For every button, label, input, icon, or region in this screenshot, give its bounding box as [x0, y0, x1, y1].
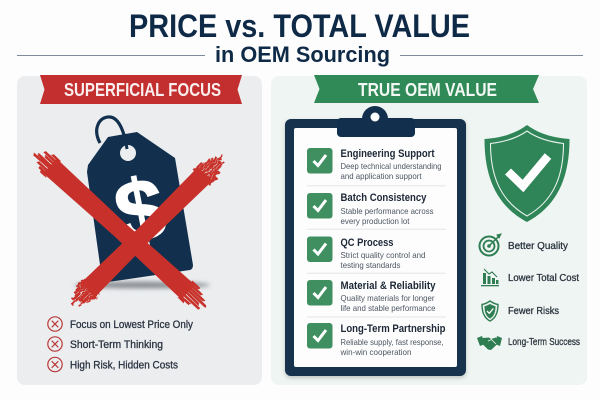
item: short-term thinking: Short-Term Thinking — [70, 339, 163, 351]
icon: target — [480, 234, 501, 256]
item: long-term partnership: Long-Term Partnership — [340, 323, 446, 335]
item: short-term thinking — [48, 337, 163, 351]
item: batch consistency: every production lot — [340, 216, 410, 226]
panel: true OEM value — [271, 75, 587, 385]
item: material and reliability — [307, 280, 436, 313]
title: PRICE vs. TOTAL VALUE — [129, 8, 470, 44]
item: engineering support: and application support — [340, 171, 422, 181]
item: hidden costs — [48, 357, 178, 372]
item: long-term partnership: win-win cooperation — [340, 347, 412, 357]
item: engineering support: Deep technical understanding — [340, 161, 442, 171]
benefit: fewer risks — [482, 301, 559, 321]
title: in OEM Sourcing — [215, 42, 390, 67]
item: lowest price: Focus on Lowest Price Only — [70, 319, 193, 331]
icon: price tag — [74, 117, 210, 288]
item: QC process — [307, 236, 426, 270]
item: QC process: QC Process — [340, 237, 394, 249]
item: batch consistency: Stable performance across — [340, 206, 434, 216]
icon: handshake — [477, 336, 502, 350]
benefit: long-term success: Long-Term Success — [508, 336, 580, 348]
item: material and reliability: life and stable performance — [340, 303, 436, 313]
item: material and reliability: Material & Reliability — [340, 280, 436, 292]
title — [17, 8, 583, 67]
item: material and reliability: Quality materials for longer — [340, 293, 435, 303]
item: batch consistency: Batch Consistency — [340, 192, 427, 204]
benefit: lower total cost: Lower Total Cost — [508, 272, 579, 284]
item: QC process: Strict quality control and — [340, 250, 426, 260]
red ribbon heading — [40, 75, 242, 104]
benefit: fewer risks: Fewer Risks — [508, 305, 559, 317]
benefit: lower total cost — [481, 269, 579, 286]
icon: price tag: $ — [107, 157, 174, 264]
benefit: long-term success — [477, 336, 580, 350]
item: engineering support: Engineering Support — [340, 148, 435, 160]
item: QC process: testing standards — [340, 260, 400, 270]
item: long-term partnership: Reliable supply, fast response, — [340, 337, 444, 347]
red ribbon heading: SUPERFICIAL FOCUS — [64, 80, 221, 100]
benefit: better quality — [480, 234, 569, 256]
icon: green shield with check — [484, 125, 570, 222]
item: long-term partnership — [307, 323, 446, 357]
icon: falling bar chart — [481, 269, 499, 286]
green ribbon heading: TRUE OEM VALUE — [358, 80, 497, 100]
green ribbon heading — [314, 75, 539, 103]
item: engineering support — [307, 148, 442, 181]
icon: small shield — [482, 301, 498, 321]
icon: red brush cross — [34, 151, 224, 309]
list: superficial drawbacks — [48, 317, 193, 372]
item: lowest price — [48, 317, 193, 331]
benefit: better quality: Better Quality — [508, 240, 569, 252]
clipboard checklist — [285, 106, 466, 376]
item: hidden costs: High Risk, Hidden Costs — [70, 360, 178, 372]
panel: superficial focus — [17, 75, 262, 385]
clipboard clip — [337, 106, 415, 137]
item: batch consistency — [307, 192, 434, 226]
